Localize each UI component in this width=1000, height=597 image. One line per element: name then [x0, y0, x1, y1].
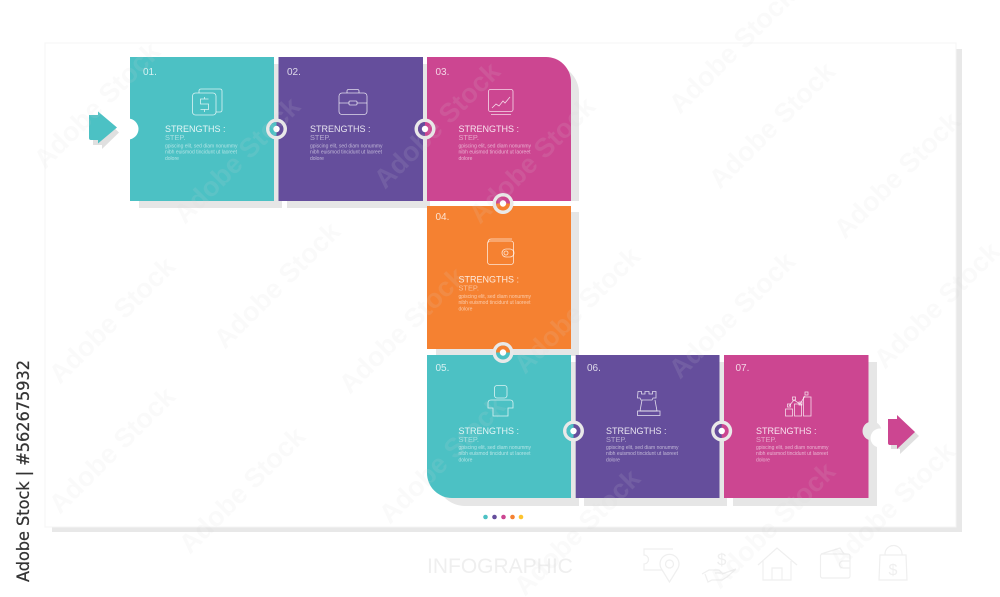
watermarks: Adobe Stock	[333, 261, 472, 399]
tile 04: STRENGTHS :	[458, 274, 519, 284]
tile 02: nibh euismod tincidunt ut laoreet	[310, 150, 383, 156]
tile 06: dolore	[606, 457, 620, 463]
tile 04: dolore	[458, 306, 473, 312]
icon: shopping bag	[879, 546, 907, 580]
tile 05: STRENGTHS :	[458, 426, 519, 436]
watermarks: Adobe Stock	[703, 56, 842, 194]
stock id text: Adobe Stock | #562675932	[14, 360, 34, 582]
watermarks: Adobe Stock	[173, 421, 312, 559]
icon: line chart monitor	[488, 90, 513, 114]
tile 03	[427, 57, 571, 201]
node 2-3	[414, 118, 436, 140]
tile 04: nibh euismod tincidunt ut laoreet	[458, 300, 531, 306]
tile 03: STEP.	[458, 133, 479, 142]
tile 02: STEP.	[310, 133, 330, 142]
watermarks: Adobe Stock	[168, 91, 307, 229]
tile 02: dolore	[310, 156, 324, 162]
notch	[862, 422, 882, 440]
exit arrow	[888, 415, 919, 454]
tile 04: STEP.	[458, 284, 479, 292]
tile 04: 04.	[436, 212, 449, 223]
tile 05: dolore	[458, 457, 473, 463]
tile 06: 06.	[587, 363, 601, 374]
icon: bar chart growth	[786, 392, 811, 416]
tile 05	[427, 355, 571, 498]
node 6-7	[711, 420, 732, 442]
tile 02: STRENGTHS :	[310, 124, 371, 134]
watermarks: Adobe Stock	[373, 391, 512, 529]
node 5-6	[563, 420, 584, 442]
node 1-2	[266, 118, 287, 140]
icon: wallet	[488, 239, 514, 264]
tile 06: STEP.	[606, 435, 626, 444]
watermarks: Adobe Stock	[508, 241, 647, 379]
icon: house	[758, 548, 797, 580]
watermarks: Adobe Stock	[663, 246, 802, 384]
tile 05: nibh euismod tincidunt ut laoreet	[458, 451, 531, 457]
watermarks: Adobe Stock	[703, 456, 842, 594]
icon: wallet	[820, 548, 850, 578]
tile 07	[724, 355, 890, 498]
tile 02: gpiscing elit, sed diam nonummy	[310, 144, 383, 150]
icon: hand with dollar	[702, 550, 736, 582]
icon: shopping bag: $	[888, 562, 898, 579]
node 3-4	[492, 193, 514, 214]
pagination dots	[483, 515, 523, 519]
tile 03: dolore	[458, 156, 473, 162]
tile shadows	[139, 64, 877, 506]
tile 07: STEP.	[756, 435, 776, 444]
tile 07: 07.	[736, 363, 749, 374]
icon: briefcase	[339, 90, 367, 114]
tile 03: nibh euismod tincidunt ut laoreet	[458, 150, 531, 156]
tile 04: gpiscing elit, sed diam nonummy	[458, 294, 532, 300]
tile 06: gpiscing elit, sed diam nonummy	[606, 445, 679, 451]
tile 01: STRENGTHS :	[165, 124, 226, 134]
tile 06	[576, 355, 720, 498]
tile 03: 03.	[436, 67, 449, 78]
tile 05: 05.	[436, 363, 449, 374]
node 4-5	[492, 342, 514, 363]
connector nodes	[266, 118, 732, 442]
tile 07: STRENGTHS :	[756, 426, 817, 436]
tile 02: 02.	[287, 67, 301, 78]
tile 01: 01.	[143, 67, 157, 78]
tile 06: STRENGTHS :	[606, 426, 667, 436]
entry arrow	[89, 112, 119, 149]
tile 01: gpiscing elit, sed diam nonummy	[165, 144, 238, 150]
tile 01	[118, 57, 274, 201]
tile 01: nibh euismod tincidunt ut laoreet	[165, 150, 238, 156]
tile 02	[278, 57, 423, 201]
watermarks: Adobe Stock	[463, 91, 602, 229]
tile 01: STEP.	[165, 133, 185, 142]
watermarks: Adobe Stock	[823, 436, 962, 574]
tile 03: gpiscing elit, sed diam nonummy	[458, 144, 532, 150]
tile 07: gpiscing elit, sed diam nonummy	[756, 445, 829, 451]
tile 01: dolore	[165, 156, 179, 162]
footer title: INFOGRAPHIC	[427, 555, 573, 578]
watermarks: Adobe Stock	[368, 56, 507, 194]
watermarks: Adobe Stock	[828, 106, 967, 244]
tile 07: dolore	[756, 457, 770, 463]
icon: map pin ticket	[644, 549, 679, 582]
watermarks: Adobe Stock	[28, 36, 167, 174]
tile 04	[427, 206, 571, 349]
footer icons	[644, 546, 907, 582]
tile 07: nibh euismod tincidunt ut laoreet	[756, 451, 829, 457]
watermarks: Adobe Stock	[43, 251, 182, 389]
background card	[45, 43, 962, 532]
icon: person	[488, 386, 513, 416]
icon: money cards	[192, 89, 222, 115]
watermarks: Adobe Stock	[208, 216, 347, 354]
tile 05: gpiscing elit, sed diam nonummy	[458, 445, 532, 451]
tile 06: nibh euismod tincidunt ut laoreet	[606, 451, 679, 457]
watermarks: Adobe Stock	[43, 381, 182, 519]
tile 03: STRENGTHS :	[458, 124, 519, 134]
icon: chess rook	[638, 392, 660, 416]
icon: hand with dollar: $	[717, 550, 727, 569]
tile 05: STEP.	[458, 435, 479, 444]
